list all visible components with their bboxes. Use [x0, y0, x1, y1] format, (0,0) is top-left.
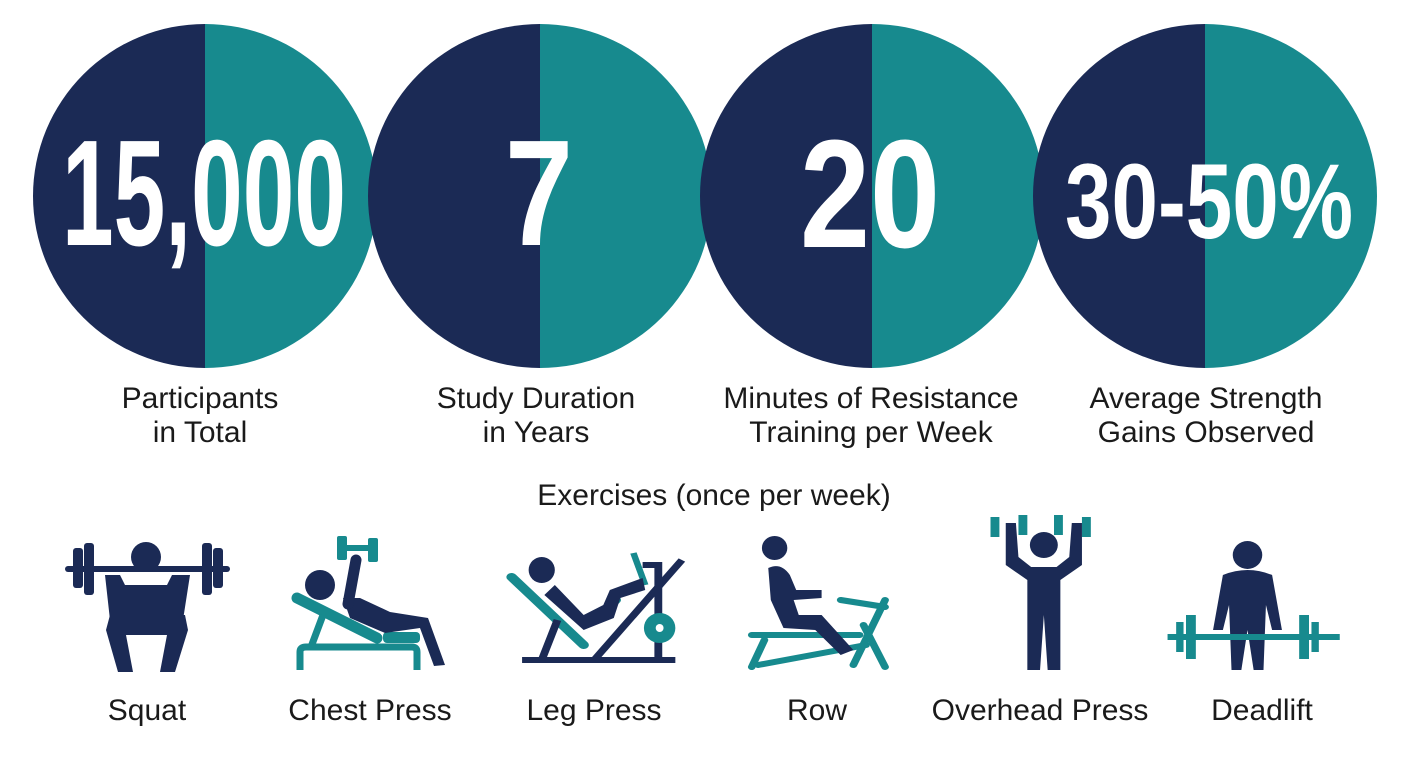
- stat circle: minutes: [697, 20, 1047, 380]
- label: participants: in Total: [153, 416, 247, 449]
- label: duration: in Years: [483, 416, 589, 449]
- number: 20: 20: [800, 108, 940, 280]
- stat circle: strength gains: [1030, 20, 1380, 380]
- icon: deadlift: [1168, 541, 1340, 670]
- label: leg press: Leg Press: [526, 694, 662, 727]
- number: 7: 7: [505, 108, 573, 277]
- label: squat: Squat: [108, 694, 187, 727]
- icon: overhead press: [991, 515, 1091, 670]
- label: duration: Study Duration: [437, 382, 635, 415]
- number: 15,000: 15,000: [62, 108, 346, 277]
- label: overhead press: Overhead Press: [932, 694, 1148, 727]
- label: deadlift: Deadlift: [1211, 694, 1314, 727]
- label: minutes: Training per Week: [749, 416, 994, 449]
- icon: leg press: [512, 553, 682, 660]
- icon: row: [752, 536, 885, 667]
- label: minutes: Minutes of Resistance: [723, 382, 1019, 415]
- label: chest press: Chest Press: [288, 694, 452, 727]
- label: row: Row: [787, 694, 847, 727]
- label: strength: Average Strength: [1090, 382, 1322, 415]
- icon: squat: [65, 542, 230, 672]
- label: strength: Gains Observed: [1098, 416, 1314, 449]
- icon: chest press: [297, 536, 445, 670]
- label: participants: Participants: [122, 382, 278, 415]
- stat circle: duration: [365, 20, 715, 380]
- subheading: Exercises (once per week): [537, 479, 891, 512]
- stat circle: participants: [30, 20, 380, 380]
